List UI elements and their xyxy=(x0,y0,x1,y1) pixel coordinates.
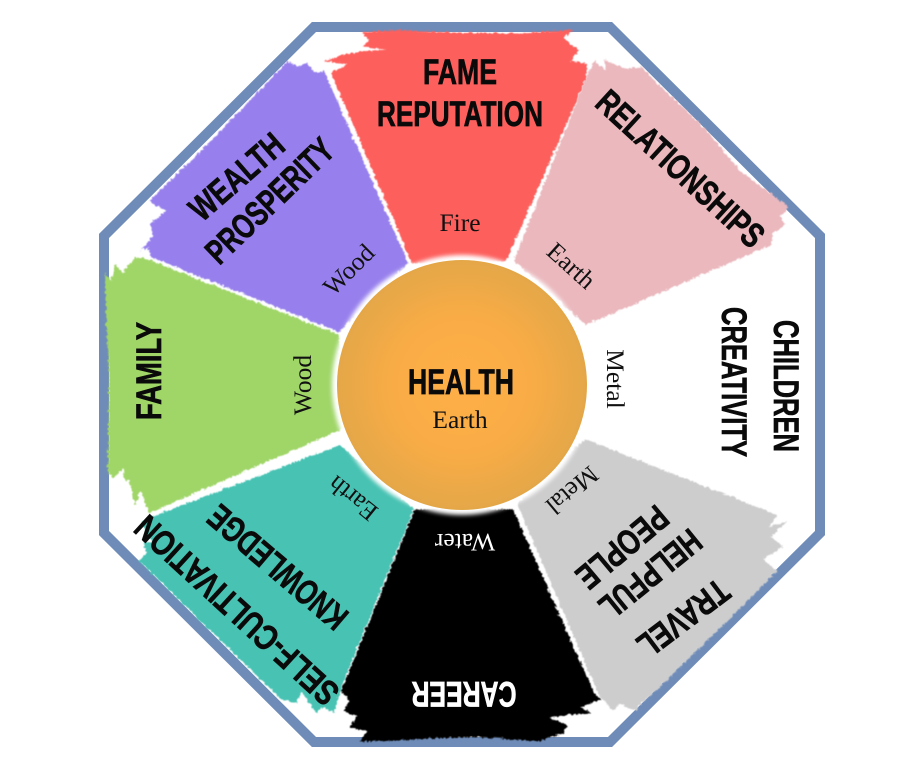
heading: children creativity xyxy=(714,307,805,457)
heading: wealth prosperity: PROSPERITY xyxy=(198,130,342,272)
heading: self-cultivation knowledge: KNOWLEDGE xyxy=(200,497,356,637)
panel: self-cultivation knowledge xyxy=(127,444,413,713)
heading: children creativity: CREATIVITY xyxy=(714,307,753,457)
panel: fame reputation xyxy=(323,29,586,262)
heading: health: HEALTH xyxy=(408,363,514,402)
label: fire: Fire xyxy=(439,208,481,237)
heading: wealth prosperity: WEALTH xyxy=(182,125,292,229)
heading: fame reputation xyxy=(377,53,543,134)
label: earth: Earth xyxy=(432,405,488,434)
heading: self-cultivation knowledge: SELF-CULTIVATION xyxy=(127,507,347,713)
heading: travel helpful people: HELPFUL xyxy=(591,521,709,627)
heading: fame reputation: REPUTATION xyxy=(377,95,543,134)
heading: family: FAMILY xyxy=(130,322,169,420)
label: water: Water xyxy=(434,528,495,557)
heading: travel helpful people: PEOPLE xyxy=(568,497,676,596)
panel: travel helpful people xyxy=(516,438,786,710)
heading: fame reputation: FAME xyxy=(423,53,497,92)
heading: self-cultivation knowledge xyxy=(127,497,356,713)
octagon border xyxy=(104,27,820,742)
heading: wealth prosperity xyxy=(182,125,342,272)
panel: family xyxy=(104,256,341,512)
panel: wealth prosperity xyxy=(140,60,407,331)
panel: career xyxy=(340,508,600,741)
heading: children creativity: CHILDREN xyxy=(766,320,805,452)
panel: children creativity xyxy=(601,307,805,457)
label: metal: Metal xyxy=(601,349,630,409)
heading: travel helpful people xyxy=(568,497,737,665)
heading: relationships: RELATIONSHIPS xyxy=(588,82,772,256)
label: wood: Wood xyxy=(317,238,380,301)
panel: health centre xyxy=(332,255,592,515)
panel: relationships xyxy=(513,58,788,324)
label: earth: Earth xyxy=(322,470,383,527)
heading: career: CAREER xyxy=(412,674,516,713)
label: wood: Wood xyxy=(288,355,317,415)
heading: travel helpful people: TRAVEL xyxy=(629,571,737,665)
label: earth: Earth xyxy=(541,236,602,295)
label: metal: Metal xyxy=(540,460,604,521)
